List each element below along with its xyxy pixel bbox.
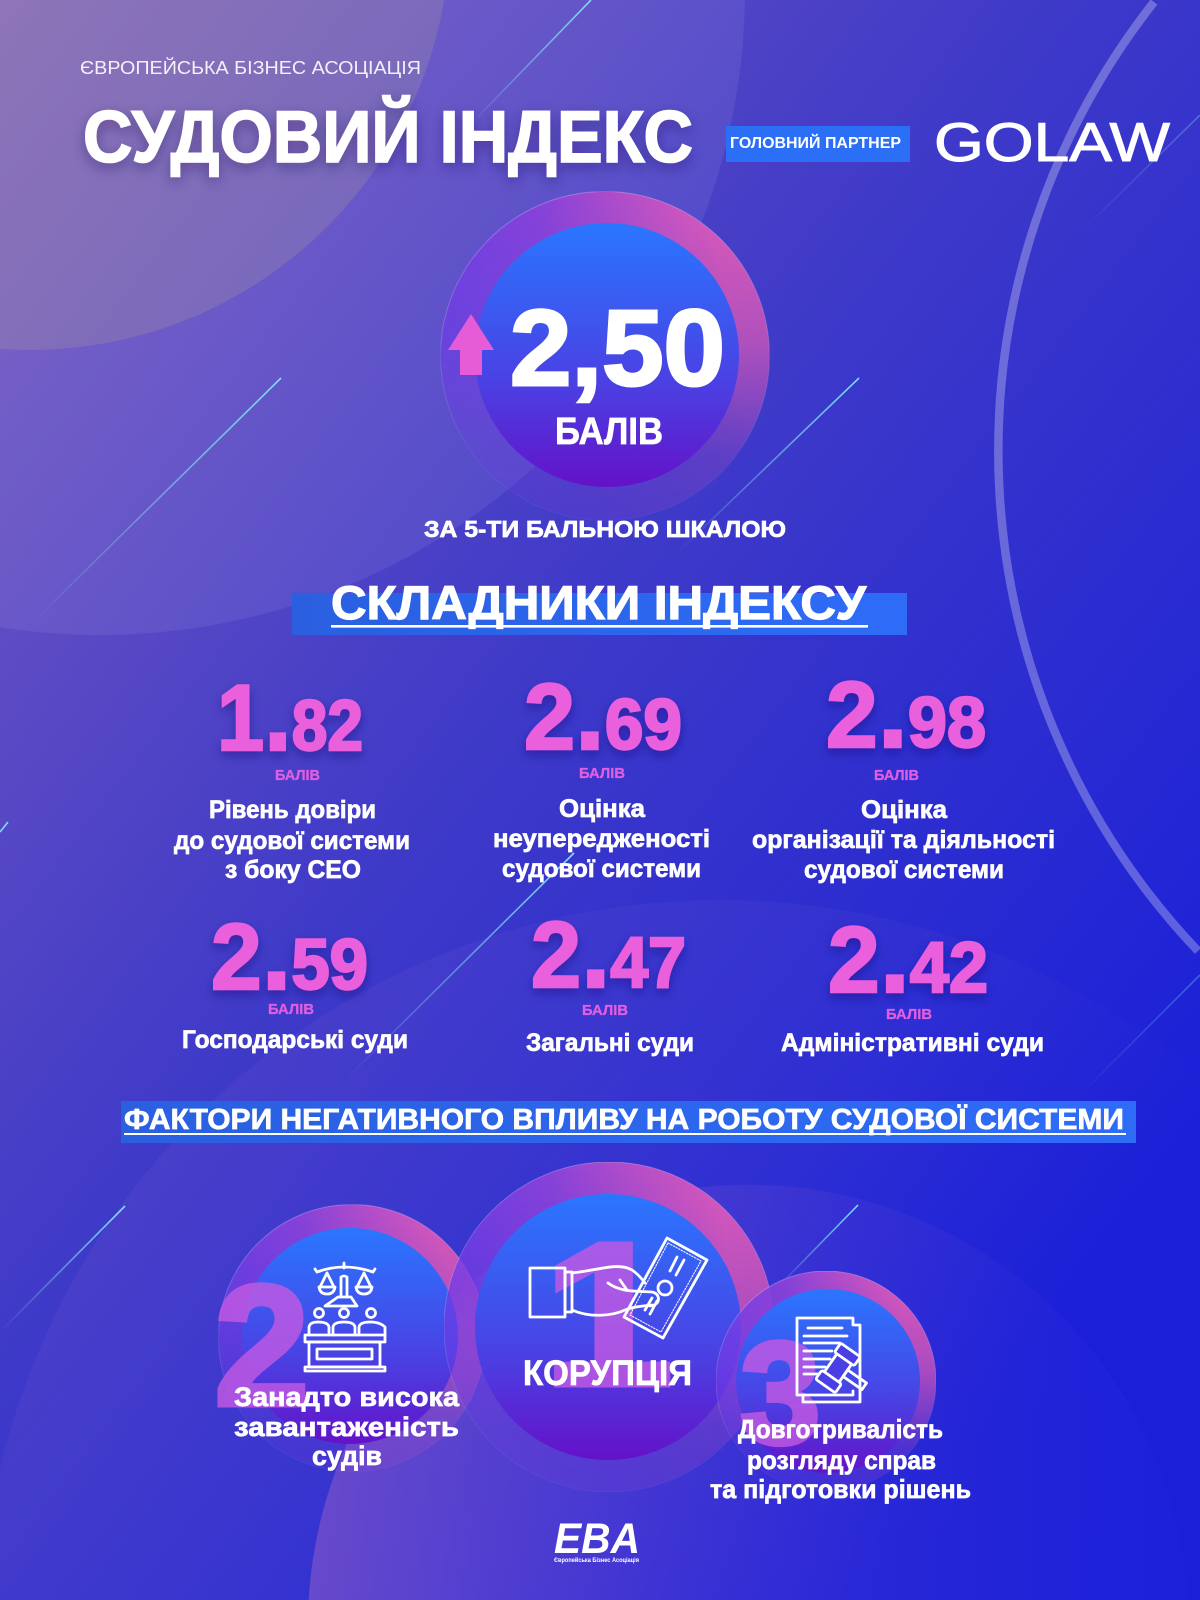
factor label (710, 1414, 971, 1504)
rank number: 1 (542, 1200, 674, 1429)
metric: impartiality (493, 650, 710, 883)
metric: impartiality: 2.69 (524, 650, 682, 773)
icon: hand with banknote (530, 1238, 707, 1338)
logo: EBA: EBA (554, 1515, 640, 1563)
metric: general courts: БАЛІВ (582, 1002, 628, 1019)
metric: general courts (526, 888, 694, 1057)
metric: administrative courts: 2.42 (828, 893, 988, 1016)
metric: organisation (752, 648, 1055, 884)
factor label: розгляду справ (747, 1445, 936, 1475)
factor label: КОРУПЦІЯ (523, 1354, 692, 1393)
metric: commercial courts: 2.59 (211, 890, 368, 1013)
metric: commercial courts: Господарські суди (182, 1026, 408, 1054)
metric: administrative courts (781, 893, 1044, 1057)
partner tag: ГОЛОВНИЙ ПАРТНЕР (730, 134, 901, 152)
icon: judges and scales (305, 1263, 385, 1371)
score unit: БАЛІВ (555, 411, 663, 453)
factor label: Довготривалість (738, 1414, 943, 1444)
scale note: ЗА 5-ТИ БАЛЬНОЮ ШКАЛОЮ (424, 516, 786, 542)
icon: up arrow (448, 314, 494, 375)
metric: administrative courts: Адміністративні суди (781, 1029, 1044, 1057)
metric: trust: 1.82 (217, 651, 363, 774)
metric: trust: з боку CEO (225, 856, 361, 884)
icon: document and gavel (797, 1318, 877, 1404)
metric: trust: БАЛІВ (275, 767, 320, 784)
factor label: завантаженість (234, 1412, 459, 1442)
metric: impartiality: неупередженості (493, 825, 710, 853)
factor label: та підготовки рішень (710, 1474, 971, 1504)
metric: organisation: Оцінка (861, 796, 948, 824)
logo: EBA: Європейська Бізнес Асоціація (554, 1556, 639, 1564)
metric: general courts: 2.47 (531, 888, 686, 1011)
factor 1: corruption (444, 1162, 774, 1492)
factor label: судів (312, 1441, 382, 1471)
metric: trust (174, 651, 410, 884)
title: СУДОВИЙ ІНДЕКС (83, 96, 693, 178)
metric: organisation: судової системи (804, 856, 1004, 884)
rank number: 3 (740, 1312, 821, 1474)
metric: commercial courts (182, 890, 408, 1054)
metric: trust: до судової системи (174, 827, 410, 855)
metric: administrative courts: БАЛІВ (886, 1006, 932, 1023)
metric: general courts: Загальні суди (526, 1029, 694, 1057)
metric: impartiality: судової системи (502, 855, 701, 883)
metric: impartiality: Оцінка (559, 795, 646, 823)
factor 3: duration (710, 1271, 971, 1504)
heading: index components: СКЛАДНИКИ ІНДЕКСУ (331, 576, 867, 629)
rank number: 2 (214, 1250, 310, 1442)
metric: organisation: організації та діяльності (752, 826, 1055, 854)
organisation label: ЄВРОПЕЙСЬКА БІЗНЕС АСОЦІАЦІЯ (80, 57, 421, 78)
metric: impartiality: БАЛІВ (579, 765, 625, 782)
metric: organisation: БАЛІВ (874, 767, 919, 784)
factor 2: workload (214, 1204, 486, 1472)
score circle (440, 192, 770, 520)
metric: organisation: 2.98 (826, 648, 986, 771)
heading: negative factors: ФАКТОРИ НЕГАТИВНОГО ВПЛИВУ НА РОБОТУ СУДОВОЇ СИСТЕМИ (124, 1103, 1124, 1136)
metric: trust: Рівень довіри (209, 796, 376, 824)
factor label (234, 1382, 460, 1471)
partner logo: GOLAW (934, 111, 1170, 173)
partner tag (726, 126, 910, 162)
metric: commercial courts: БАЛІВ (268, 1001, 314, 1018)
factor label: Занадто висока (234, 1382, 460, 1412)
score value: 2,50 (510, 287, 725, 408)
